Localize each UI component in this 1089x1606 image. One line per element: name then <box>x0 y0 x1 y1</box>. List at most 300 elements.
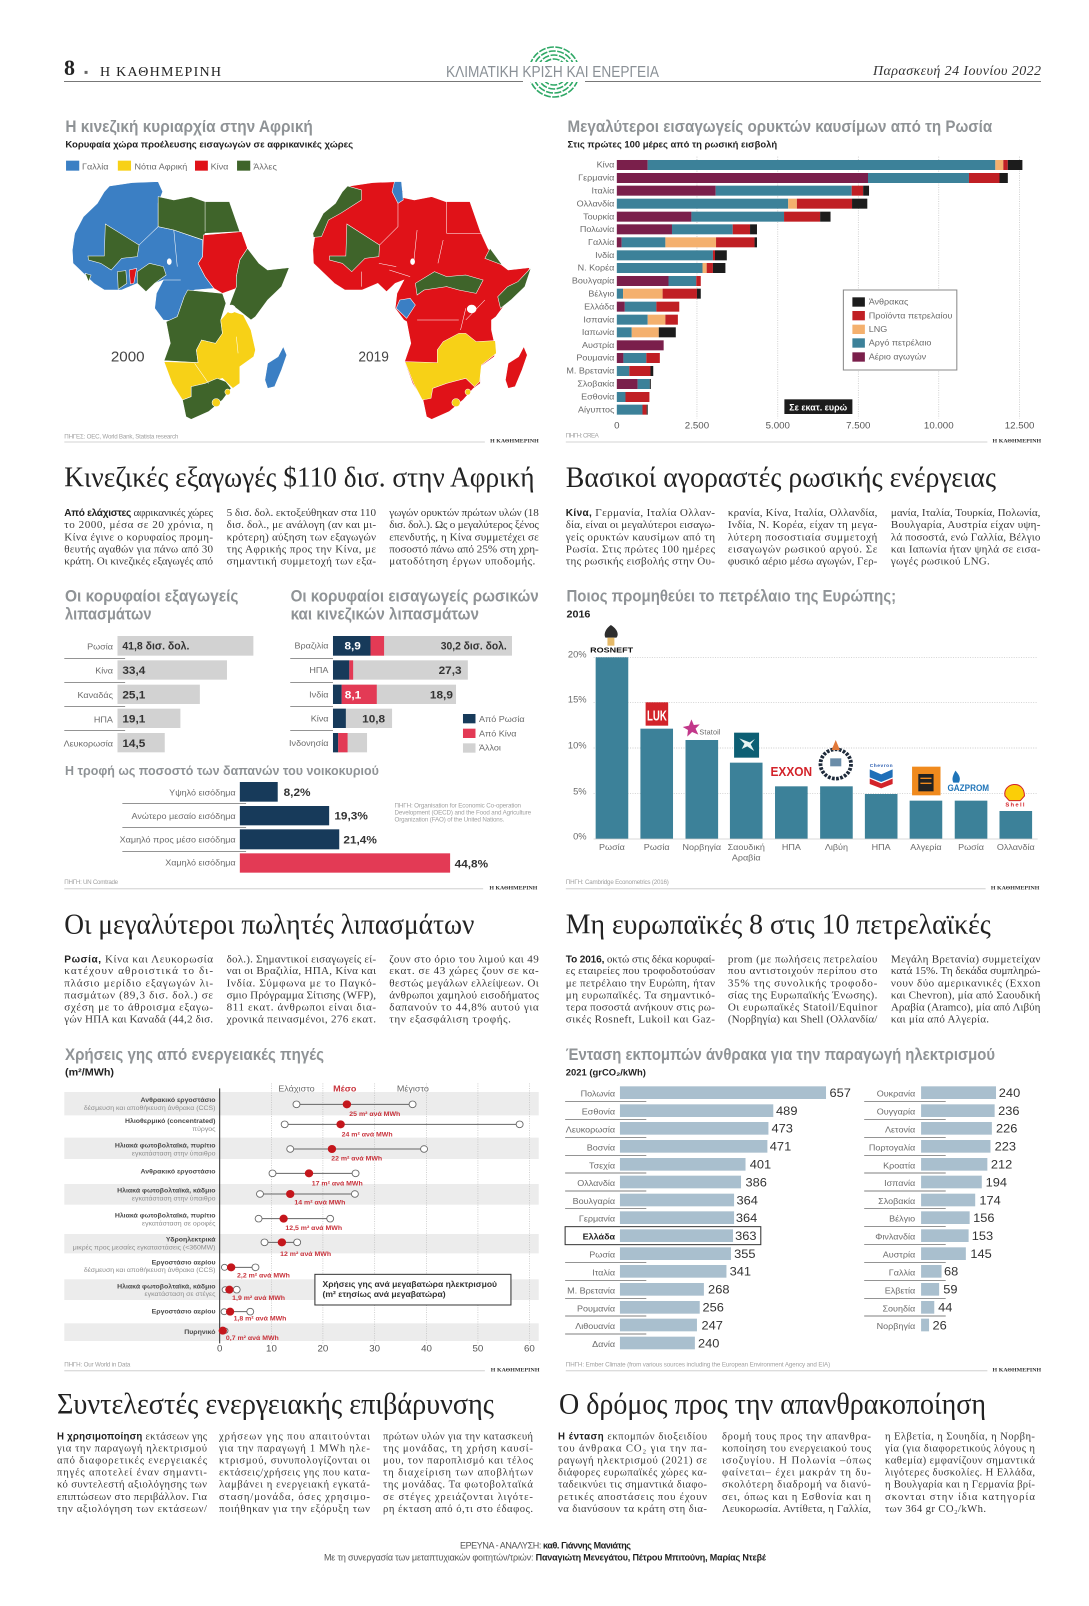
map year 2019: 2019 <box>358 349 389 366</box>
article text: χρονικά πεινασμένοι, 276 εκατ. <box>226 1014 376 1026</box>
article text: δισ. δολ., με ανάλογη (αν και μι- <box>227 519 376 531</box>
article text: γωγές ρωσικού LNG. <box>890 556 990 568</box>
article text: ναι οι Βραζιλία, ΗΠΑ, Κίνα και <box>227 965 376 977</box>
source: ΠΗΓΗ: CREA <box>566 433 600 440</box>
column headers: Ελάχιστο <box>278 1084 315 1094</box>
bar chart: food spend: 19,3% <box>334 811 368 823</box>
row labels: Ηλιακά φωτοβολταϊκά, κάδμιο <box>117 1187 215 1195</box>
row labels: μικρές προς μεσαίες εγκαταστάσεις (<360MW) <box>73 1243 215 1251</box>
heading: Μεγαλύτεροι εισαγωγείς ορυκτών καυσίμων από τη Ρωσία <box>568 117 993 136</box>
callout: Χρήσεις γης ανά μεγαβατώρα ηλεκτρισμού <box>323 1279 497 1289</box>
article text: δία, είναι οι μεγαλύτεροι εισαγω- <box>566 519 715 531</box>
headline left: Συντελεστές ενεργειακής επιβάρυνσης <box>57 1388 494 1420</box>
bar chart: carbon intensity right column: 153 <box>972 1229 993 1243</box>
bar chart: carbon intensity left column: Πολωνία <box>581 1089 615 1099</box>
bar chart: carbon intensity left column: Γερμανία <box>579 1214 615 1224</box>
article text left: για την παραγωγή ηλεκτρισμού <box>56 1443 207 1454</box>
x axis labels <box>614 420 1034 431</box>
legend: Προϊόντα πετρελαίου <box>869 310 953 320</box>
bar chart: carbon intensity left column: 355 <box>734 1247 755 1261</box>
callout <box>315 1274 511 1305</box>
heading: Ένταση εκπομπών άνθρακα για την παραγωγή ηλεκτρισμού <box>566 1045 995 1064</box>
icon: Shell logo <box>1005 784 1025 809</box>
article text right: Λευκορωσία. Αντίθετα, η Γαλλία, <box>722 1504 871 1515</box>
mean markers <box>219 1100 351 1335</box>
bar chart: fertilizer exporters: Ρωσία <box>87 642 113 651</box>
country labels: Ινδία <box>595 250 614 260</box>
article text right: σκονται στην ίδια κατηγορία <box>885 1492 1035 1503</box>
min and max markers <box>221 1101 523 1333</box>
bar chart: carbon intensity left column: 471 <box>770 1140 791 1154</box>
bar chart: carbon intensity left column: Ρουμανία <box>577 1303 615 1313</box>
country labels: Κίνα <box>597 160 614 170</box>
article text left <box>56 1431 534 1515</box>
article text left: εκτάσεις/χρήσεις γης που κατα- <box>219 1468 370 1479</box>
article text: Μεγάλη Βρετανία) συμμετείχαν <box>891 954 1041 966</box>
article text: σίας της Ευρωπαϊκής Ένωσης). <box>728 990 877 1001</box>
bar chart: fertilizer exporters: 41,8 δισ. δολ. <box>122 641 189 653</box>
y axis labels: 0% <box>573 831 587 841</box>
bar chart: food spend <box>120 782 488 873</box>
article text left: την αξιολόγηση των εκτάσεων/ <box>57 1504 207 1515</box>
bar chart: fertilizer importers: 18,9 <box>430 690 453 701</box>
article text right: σει, όπως και η Εσθονία και η <box>722 1492 871 1503</box>
footer credits: ΕΡΕΥΝΑ - ΑΝΑΛΥΣΗ: καθ. Γιάννης Μανιάτης <box>460 1540 631 1550</box>
article text: Ρωσία. Στις πρώτες 100 ημέρες <box>566 544 716 556</box>
x axis labels: 50 <box>473 1344 483 1355</box>
bar chart: food spend: Ανώτερο μεσαίο εισόδημα <box>131 811 236 821</box>
article text: φυσικό αέριο μέσω αγωγών, Γερ- <box>728 556 878 568</box>
bar chart: carbon intensity right column: Ελβετία <box>885 1285 915 1295</box>
article text left: ποιήθηκαν για την εξόρυξη των <box>219 1504 370 1515</box>
article text <box>64 507 539 568</box>
map: Africa 2000 <box>72 182 289 419</box>
article text left: λαμβάνει η ενεργειακή εγκατά- <box>219 1480 370 1491</box>
map legend: Άλλες <box>253 162 277 171</box>
mean value labels: 2,2 m² ανά MWh <box>237 1273 290 1280</box>
subheading: Κορυφαία χώρα προέλευσης εισαγωγών σε αφρικανικές χώρες <box>65 140 353 151</box>
mean value labels: 17 m² ανά MWh <box>312 1181 363 1188</box>
article text right: δρομή τους προς την απανθρα- <box>722 1431 871 1442</box>
bar chart: carbon intensity left column: Ολλανδία <box>577 1178 615 1188</box>
article text left: κό συντελεστή αξιολόγησης των <box>57 1480 207 1491</box>
footer credits <box>324 1540 767 1563</box>
icon: Statoil logo: Statoil <box>699 729 721 737</box>
x axis labels: 10 <box>266 1344 277 1355</box>
article text left: σταση/μονάδα, όσες χρησιμο- <box>219 1492 370 1503</box>
country labels: Ν. Κορέα <box>578 263 614 273</box>
callout: (m² ετησίως ανά μεγαβατώρα) <box>323 1289 446 1299</box>
headline right: Ο δρόμος προς την απανθρακοποίηση <box>559 1388 986 1420</box>
row labels: Ηλιοθερμικό (concentrated) <box>125 1117 215 1125</box>
bar chart: carbon intensity left column: Ρωσία <box>589 1250 615 1260</box>
article text right: γία (για διαφορετικούς λόγους η <box>884 1443 1035 1454</box>
row labels: Ηλιακά φωτοβολταϊκά, κάδμιο <box>117 1282 215 1290</box>
bar chart: carbon intensity right column: Σουηδία <box>882 1303 915 1313</box>
article text: με πετρέλαιο την Ευρώπη, ήταν <box>566 978 715 989</box>
bar chart: fertilizer importers: 27,3 <box>439 665 462 677</box>
bar chart: fertilizer exporters: Λευκορωσία <box>64 739 113 749</box>
map legend <box>66 161 277 171</box>
bar chart: food spend: Χαμηλό εισόδημα <box>165 857 236 867</box>
x axis labels: Αραβία <box>732 853 761 863</box>
article text right: Η ένταση εκπομπών διοξειδίου <box>558 1431 707 1442</box>
article text left: πρώτων υλών για την κατασκευή <box>383 1431 533 1442</box>
icon: Chevron logo: Chevron <box>870 763 893 769</box>
source: ΠΗΓΗ: Our World in Data <box>64 1362 131 1369</box>
bar chart: carbon intensity left column: 386 <box>746 1176 767 1189</box>
bar chart: carbon intensity right column: 156 <box>973 1211 995 1225</box>
article text: Ινδία, Ν. Κορέα, είχαν τη μεγα- <box>728 519 878 531</box>
article text: ποσοστό πάνω από 25% στη χρη- <box>389 544 539 556</box>
x axis labels: 0 <box>217 1344 222 1355</box>
y axis labels: 15% <box>568 695 587 705</box>
heading: top fertilizer exporters <box>65 587 239 623</box>
row labels: Ηλιακά φωτοβολταϊκά, πυρίτιο <box>115 1141 215 1149</box>
bar chart: carbon intensity right column: Νορβηγία <box>877 1321 915 1331</box>
row labels: Εργοστάσιο αερίου <box>152 1259 216 1266</box>
bar chart: carbon intensity left column: 364 <box>736 1211 757 1225</box>
article text: σχέση με το άθροισμα εξαγω- <box>64 1002 213 1014</box>
bar chart: carbon intensity right column: 212 <box>991 1158 1012 1172</box>
article text: την εξασφάλιση τροφής. <box>389 1014 511 1026</box>
article text: Οι ευρωπαϊκές Statoil/Equinor <box>728 1002 878 1014</box>
article text: και Ιαπωνία ήταν ψηλά σε εισα- <box>891 544 1041 556</box>
bar chart: carbon intensity left column: Τσεχία <box>589 1160 615 1170</box>
article text: Αραβία (Aramco), μία από Λιβύη <box>891 1002 1041 1014</box>
bar chart: carbon intensity right column: Αυστρία <box>883 1250 915 1260</box>
bar chart: carbon intensity right column: 68 <box>944 1265 958 1279</box>
bar chart: fertilizer importers: ΗΠΑ <box>309 665 329 675</box>
bar chart: carbon intensity left column: Βοσνία <box>587 1142 615 1152</box>
country labels: Μ. Βρετανία <box>566 366 614 376</box>
heading: food spend: Η τροφή ως ποσοστό των δαπανών του νοικοκυριού <box>65 763 379 778</box>
article text: θευτής αγαθών για πάνω από 30 <box>64 544 214 556</box>
bar chart: carbon intensity right column: 226 <box>996 1122 1017 1136</box>
article text right: λιγότερες δυσκολίες. Η Ελλάδα, <box>885 1468 1035 1479</box>
bar chart: fertilizer exporters: Καναδάς <box>77 690 113 700</box>
row labels: Εργοστάσιο αερίου <box>152 1308 216 1315</box>
article text right: καθεμία) εμφανίζουν σημαντικά <box>885 1455 1035 1466</box>
bar chart: carbon intensity right column: Πορτογαλία <box>869 1142 915 1152</box>
x axis labels: 30 <box>369 1344 380 1355</box>
mean value labels: 14 m² ανά MWh <box>294 1199 345 1206</box>
mean value labels: 25 m² ανά MWh <box>349 1111 400 1118</box>
credit: Η ΚΑΘΗΜΕΡΙΝΗ <box>991 885 1040 891</box>
legend: LNG <box>869 324 887 334</box>
x axis labels: ΗΠΑ <box>782 842 801 852</box>
bar chart: carbon intensity left column: Δανία <box>592 1339 615 1349</box>
country labels: Πολωνία <box>580 224 614 234</box>
article text left: από διαφορετικές ενεργειακές <box>57 1455 208 1466</box>
bar chart: carbon intensity left column: 363 <box>735 1229 757 1243</box>
bar chart: carbon intensity right column: Ουκρανία <box>877 1089 915 1099</box>
x axis labels: Λιβύη <box>825 842 848 852</box>
icon: Aramco logo <box>734 733 759 758</box>
bar chart: carbon intensity left column: Λιθουανία <box>575 1321 615 1331</box>
bar chart: carbon intensity right column: 59 <box>943 1283 958 1297</box>
heading: Η κινεζική κυριαρχία στην Αφρική <box>65 117 313 136</box>
icon: Shell logo: Shell <box>1005 803 1025 809</box>
row labels <box>73 1097 216 1336</box>
country labels: Γαλλία <box>588 237 614 247</box>
headline: Κινεζικές εξαγωγές $110 δισ. στην Αφρική <box>64 463 535 494</box>
panel: article and land use chart <box>63 910 540 1373</box>
bar chart: carbon intensity left column: 489 <box>776 1104 797 1118</box>
bar chart: carbon intensity right column <box>864 1086 1020 1332</box>
headline: Βασικοί αγοραστές ρωσικής ενέργειας <box>566 463 997 494</box>
footer credits: Με τη συνεργασία των μεταπτυχιακών φοιτητών/τριών: Παναγιώτη Μενεγάτου, Πέτρου Μπιτούνη, Μαρίας Ντεβέ <box>324 1553 767 1563</box>
row labels: εγκατάσταση σε οροφές <box>142 1219 216 1227</box>
panel: article and fertilizer charts <box>64 463 539 891</box>
article text: κατά 15%. Τη δεκάδα συμπληρώ- <box>891 965 1041 977</box>
bar chart: food spend: Χαμηλό προς μέσο εισόδημα <box>120 834 236 844</box>
panel: closing articles <box>56 1388 1035 1563</box>
article text left: της μονάδας. Τα φωτοβολταϊκά <box>383 1480 533 1491</box>
article text: γών ΗΠΑ και Καναδά (44,2 δισ. <box>63 1014 213 1026</box>
article text: κατέχουν αθροιστικά το δι- <box>64 965 213 977</box>
article text: το 2000, μέσα σε 20 χρόνια, η <box>64 519 213 531</box>
article text: κρότερη) αύξηση των εξαγωγών <box>227 532 376 543</box>
article text: ζουν στο όριο του λιμού και 49 <box>389 954 539 966</box>
unit badge <box>784 399 852 414</box>
article text <box>566 954 1041 1026</box>
country labels: Γερμανία <box>578 173 614 183</box>
mean value labels <box>226 1111 400 1342</box>
article text: prom (με πωλήσεις πετρελαίου <box>728 954 877 966</box>
icon: Rosneft logo <box>590 625 633 655</box>
country labels: Αυστρία <box>582 340 614 350</box>
bar chart: fertilizer exporters: 19,1 <box>122 714 146 726</box>
panel: Chinese dominance in Africa maps <box>64 117 539 445</box>
map legend: Νότια Αφρική <box>135 162 187 171</box>
article text: σμιο Πρόγραμμα Σίτισης (WFP), <box>227 990 376 1001</box>
legend: Άνθρακας <box>869 297 908 307</box>
legend: Άλλοι <box>479 743 501 753</box>
x axis labels: Ρωσία <box>958 842 984 852</box>
article text: σημαντική συμμετοχή των εξα- <box>227 556 376 568</box>
row labels: Ηλιακά φωτοβολταϊκά, πυρίτιο <box>115 1211 215 1219</box>
bar chart: carbon intensity right column: 26 <box>933 1319 947 1332</box>
credit: Η ΚΑΘΗΜΕΡΙΝΗ <box>489 885 538 891</box>
article text right: ισοζυγίου. Η Πολωνία –όπως <box>722 1455 872 1466</box>
legend: Από Κίνα <box>479 728 517 738</box>
article text: δολ.). Σημαντικοί εισαγωγείς εί- <box>227 954 376 966</box>
bar chart: fertilizer importers: 8,9 <box>344 641 361 653</box>
article text left: ρη έκταση από ό,τι στο έδαφος. <box>383 1504 533 1515</box>
heading: top importers: και κινεζικών λιπασμάτων <box>291 605 479 623</box>
source note: Development (OECD) and the Food and Agriculture <box>395 809 532 816</box>
x axis labels: 5.000 <box>766 420 790 431</box>
bar chart: carbon intensity right column: Κροατία <box>883 1160 915 1170</box>
country labels: Τουρκία <box>583 211 614 221</box>
x axis labels: Σαουδική <box>728 842 765 852</box>
article text: δισ. δολ.). Ως ο μεγαλύτερος ξένος <box>389 519 539 531</box>
source: ΠΗΓΗ: Ember Climate (from various sources including the European Environment Agency and EIA) <box>566 1362 830 1369</box>
bar chart: carbon intensity right column: Βέλγιο <box>889 1214 915 1224</box>
section title: ΚΛΙΜΑΤΙΚΗ ΚΡΙΣΗ ΚΑΙ ΕΝΕΡΓΕΙΑ <box>446 64 660 81</box>
country labels: Ιταλία <box>592 185 614 195</box>
article text: 5 δισ. δολ. εκτοξεύθηκαν στα 110 <box>227 507 377 519</box>
article text: Το 2016, οκτώ στις δέκα κορυφαί- <box>566 954 715 966</box>
x axis labels <box>599 842 1035 863</box>
bar chart: carbon intensity right column: 240 <box>999 1086 1020 1100</box>
bar chart: carbon intensity right column: 174 <box>979 1194 1001 1207</box>
article text right: ταδεικνύει τις σημαντικά διαφο- <box>558 1480 707 1491</box>
bar chart: carbon intensity right column: Σλοβακία <box>878 1196 915 1206</box>
y axis labels <box>568 649 587 841</box>
icon: Sonatrach logo <box>912 767 941 795</box>
row labels: εγκατάσταση σε στέγες <box>145 1290 216 1298</box>
bar chart: carbon intensity left column: 473 <box>772 1122 793 1136</box>
bar chart: carbon intensity left column: 657 <box>829 1086 851 1100</box>
icon: green fingerprint logo <box>525 47 583 97</box>
panel: fossil fuel importers stacked bars <box>566 117 1042 445</box>
row labels: Υδροηλεκτρικά <box>166 1235 216 1243</box>
callout: Greece highlight: Ελλάδα <box>583 1231 616 1241</box>
row labels: πύργος <box>192 1125 216 1133</box>
bar chart: carbon intensity left column: 401 <box>750 1158 771 1172</box>
article text: Κίνα, Γερμανία, Ιταλία Ολλαν- <box>566 507 715 519</box>
bar chart: fertilizer exporters: 33,4 <box>122 665 146 677</box>
unit badge: Σε εκατ. ευρώ <box>789 402 847 413</box>
bar chart: carbon intensity left column: 364 <box>737 1194 758 1207</box>
article text right: να διανύσουν τα κράτη στη δια- <box>558 1504 707 1515</box>
heading: top fertilizer exporters: Οι κορυφαίοι εξαγωγείς <box>65 587 239 606</box>
bar chart: carbon intensity left column: Λευκορωσία <box>566 1124 615 1134</box>
article text: που αντιστοιχούν περίπου στο <box>728 965 878 977</box>
country labels <box>566 160 614 414</box>
x axis labels: ΗΠΑ <box>872 842 891 852</box>
bar chart: fertilizer exporters: 14,5 <box>122 738 146 750</box>
row labels: Ανθρακικό εργοστάσιο <box>140 1097 215 1104</box>
mean value labels: 12 m² ανά MWh <box>280 1251 331 1258</box>
legend <box>843 290 957 370</box>
heading: Ποιος προμηθεύει το πετρέλαιο της Ευρώπης; <box>567 587 896 606</box>
newspaper name: Η ΚΑΘΗΜΕΡΙΝΗ <box>100 65 221 80</box>
legend <box>463 714 525 753</box>
x axis labels <box>217 1344 535 1355</box>
mean value labels: 1,9 m² ανά MWh <box>232 1295 285 1302</box>
article text left: Η χρησιμοποίηση εκτάσεων γης <box>57 1431 208 1442</box>
bar chart: carbon intensity right column: 223 <box>995 1140 1016 1154</box>
article text: επενδυτής, η Κίνα συμμετέχει σε <box>389 532 539 543</box>
bar chart: oil suppliers <box>568 625 1038 863</box>
date: Παρασκευή 24 Ιουνίου 2022 <box>872 64 1041 79</box>
bar chart: fertilizer importers: Ινδία <box>309 690 328 699</box>
article text right: η Ελβετία, η Σουηδία, η Νορβη- <box>885 1431 1035 1442</box>
bar chart: fertilizer importers: 8,1 <box>345 690 362 701</box>
article text: πασμάτων (89,3 δισ. δολ.) σε <box>64 990 213 1001</box>
bar chart: fertilizer importers: Βραζιλία <box>295 641 328 651</box>
subheading: Στις πρώτες 100 μέρες από τη ρωσική εισβολή <box>568 140 777 151</box>
article text: γωγών ορυκτών πρώτων υλών (18 <box>388 507 539 519</box>
country labels: Ιαπωνία <box>582 327 614 337</box>
headline: Μη ευρωπαϊκές 8 στις 10 πετρελαϊκές <box>566 910 991 940</box>
bar chart: carbon intensity right column: 194 <box>986 1176 1007 1189</box>
article text <box>63 954 539 1026</box>
article text: Βουλγαρία, Αυστρία είχαν υψη- <box>891 519 1041 531</box>
row labels: Ανθρακικό εργοστάσιο <box>140 1168 215 1175</box>
article text: Κίνα έγινε ο κορυφαίος προμη- <box>64 532 213 543</box>
x axis labels: Ρωσία <box>644 842 670 852</box>
bar chart: fertilizer importers: Κίνα <box>311 714 328 724</box>
article text: νουν δύο αμερικανικές (Exxon <box>891 978 1041 989</box>
article text: σικές Rosneft, Lukoil και Gaz- <box>566 1014 715 1026</box>
source note <box>395 802 532 823</box>
article text left: επιπτώσεων στο περιβάλλον. Για <box>57 1492 207 1503</box>
bar chart: food spend: 8,2% <box>284 787 311 799</box>
article text right: ρετικές αποστάσεις που έχουν <box>558 1492 707 1503</box>
country labels: Βέλγιο <box>588 288 614 298</box>
country labels: Ισπανία <box>583 314 614 324</box>
credit: Η ΚΑΘΗΜΕΡΙΝΗ <box>993 439 1042 445</box>
bullet: ▪ <box>84 65 88 79</box>
bar chart: carbon intensity left column: Εσθονία <box>582 1107 615 1117</box>
source: ΠΗΓΗ: Cambridge Econometrics (2016) <box>566 879 669 886</box>
bar chart: fertilizer exporters: ΗΠΑ <box>94 714 113 724</box>
credit: Η ΚΑΘΗΜΕΡΙΝΗ <box>993 1367 1042 1373</box>
article text: πλάσιο μερίδιο εξαγωγών λι- <box>64 978 213 989</box>
icon: Lukoil logo: LUK <box>647 708 667 724</box>
article text: λά ποσοστά, ενώ Γαλλία, Βέλγιο <box>891 532 1041 543</box>
subheading: (m²/MWh) <box>65 1067 114 1079</box>
article text: θεστώς μεγάλων ελλείψεων. Οι <box>389 978 539 989</box>
article text <box>565 507 1041 568</box>
source: ΠΗΓΗ: UN Comtrade <box>64 879 119 886</box>
range lines <box>221 1104 520 1331</box>
page header <box>64 47 1041 97</box>
article text: δαπανούν το 44,8% αυτού για <box>389 1002 539 1014</box>
bar chart: carbon intensity right column: Γαλλία <box>889 1267 915 1277</box>
x axis labels: 12.500 <box>1005 420 1034 431</box>
mean value labels: 12,5 m² ανά MWh <box>285 1225 342 1232</box>
stacked bars <box>617 160 1022 415</box>
x axis labels: 2.500 <box>685 420 709 431</box>
mean value labels: 22 m² ανά MWh <box>331 1155 382 1162</box>
x axis labels: 7.500 <box>846 420 870 431</box>
bar chart: carbon intensity left column: 240 <box>698 1337 719 1350</box>
bar chart: carbon intensity left column: Ιταλία <box>592 1267 615 1277</box>
x axis labels: 60 <box>524 1344 535 1355</box>
article text left: τη διαχείριση των αποβλήτων <box>383 1468 533 1479</box>
bar chart: fertilizer importers: Ινδονησία <box>289 738 328 748</box>
bar chart: carbon intensity left column: 341 <box>730 1265 751 1279</box>
page number: 8 <box>64 55 75 80</box>
y axis labels: 10% <box>568 740 587 750</box>
article text right: φαίνεται– έχει μακράν τη δυ- <box>722 1468 871 1479</box>
bar chart: carbon intensity right column: Ισπανία <box>884 1178 915 1188</box>
bar chart: carbon intensity left column <box>565 1086 851 1350</box>
article text right: διάφορες ευρωπαϊκές χώρες κα- <box>558 1468 707 1479</box>
article text left: χρήσεων γης που απαιτούνται <box>218 1431 370 1442</box>
y axis labels: 5% <box>573 786 587 796</box>
article text: εκατ. σε 43 χώρες ζουν σε κα- <box>389 965 539 977</box>
bar chart: carbon intensity right column: Λετονία <box>885 1124 915 1134</box>
row labels: δέσμευση και αποθήκευση άνθρακα (CCS) <box>84 1266 215 1274</box>
article text: και μία από Αλγερία. <box>891 1014 989 1026</box>
article text right <box>558 1431 1035 1515</box>
legend: Αργό πετρέλαιο <box>869 338 931 348</box>
bar chart: carbon intensity right column: 236 <box>998 1104 1020 1118</box>
mean value labels: 1,8 m² ανά MWh <box>234 1316 286 1323</box>
article text right: ραγωγή ηλεκτρισμού (2021) σε <box>558 1455 708 1466</box>
article text left: πηγές αποτελεί έναν σημαντι- <box>57 1468 207 1479</box>
article text left: της μονάδας, τη χρήση καυσί- <box>383 1443 533 1454</box>
x axis labels: Ρωσία <box>599 842 625 852</box>
bar chart: carbon intensity left column: 256 <box>703 1301 724 1315</box>
article text: ες εταιρείες που τροφοδοτούσαν <box>566 965 715 977</box>
